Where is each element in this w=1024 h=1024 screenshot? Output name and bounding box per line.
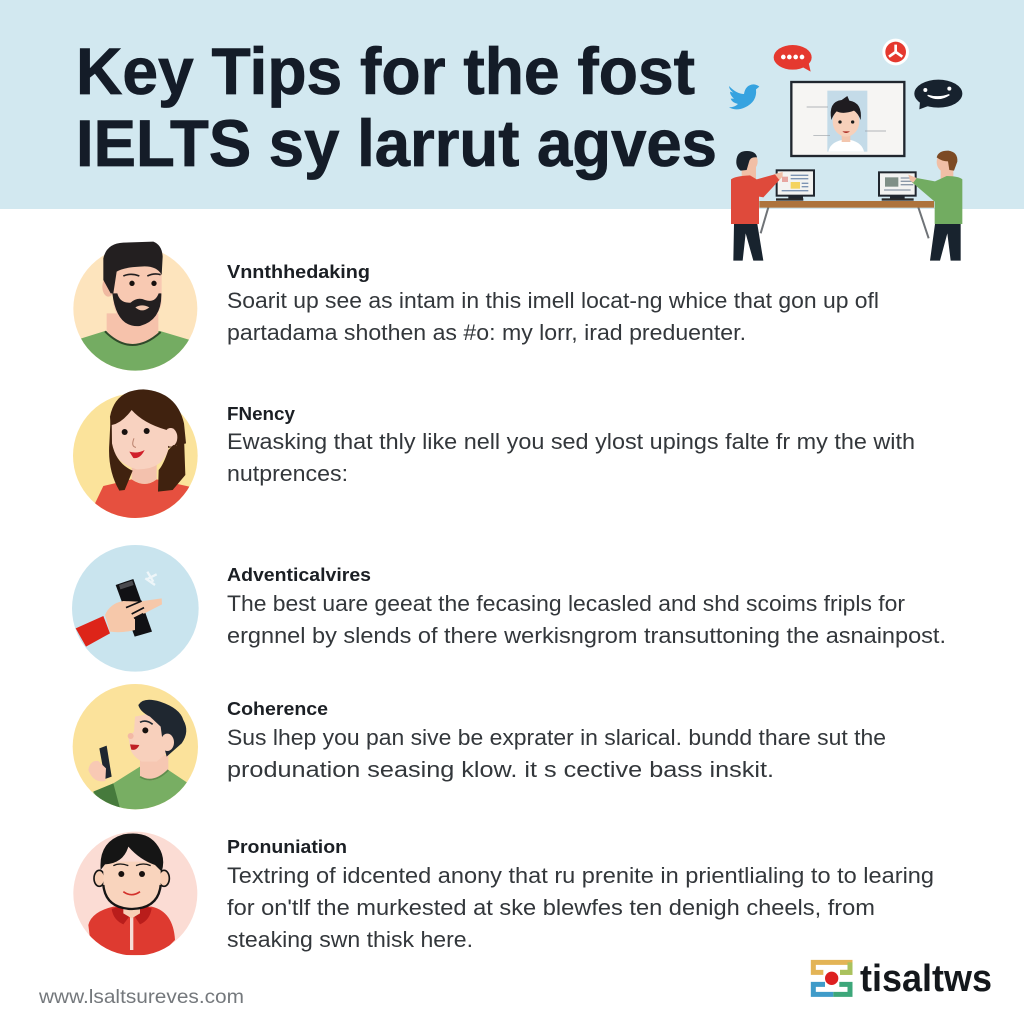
tip body text: ergnnel by slends of there werkisngrom transuttoning the asnainpost. — [227, 623, 946, 648]
avatar: smiling man in red jacket — [73, 832, 197, 956]
tip body text: Textring of idcented anony that ru prenite in prientlialing to to learing — [227, 863, 934, 888]
tip 1 — [73, 242, 879, 373]
header illustration: two people at a desk with a screen — [729, 39, 962, 261]
tip body text — [227, 288, 879, 345]
tip body text: nutprences: — [227, 461, 348, 486]
tip 3 — [72, 545, 946, 672]
icon: black smiling speech bubble — [914, 80, 962, 109]
tip body text: Soarit up see as intam in this imell locat-ng whice that gon up ofl — [227, 288, 879, 313]
tip body text — [227, 429, 915, 486]
brand logo — [813, 958, 992, 1000]
icon: red clock badge — [882, 39, 909, 65]
tip 4 — [73, 684, 886, 815]
tip body text: Ewasking that thly like nell you sed ylost upings falte fr my the with — [227, 429, 915, 454]
tip body text — [227, 591, 946, 648]
tip heading: Coherence — [227, 699, 328, 719]
desk — [759, 201, 934, 238]
right laptop monitor — [879, 172, 916, 201]
wall screen with portrait — [791, 82, 904, 156]
title: IELTS sy larrut agves — [76, 106, 717, 180]
person in green — [908, 151, 962, 261]
avatar: bearded man — [73, 242, 197, 373]
tip body text — [227, 863, 934, 952]
icon: red speech bubble — [774, 45, 812, 72]
footer website address: www.lsaltsureves.com — [38, 986, 244, 1008]
icon: blue bird — [729, 84, 759, 109]
tip body text: Sus lhep you pan sive be exprater in slarical. bundd thare sut the — [227, 725, 886, 750]
tip body text: partadama shothen as #o: my lorr, irad preduenter. — [227, 320, 746, 345]
header band — [0, 0, 1024, 209]
logo wordmark: tisaltws — [860, 958, 992, 1000]
tip heading: Adventicalvires — [227, 565, 371, 585]
title — [76, 34, 717, 180]
tip heading: FNency — [227, 404, 295, 424]
tip body text: produnation seasing klow. it s cective bass inskit. — [227, 757, 774, 782]
person in red — [731, 151, 783, 261]
avatar: hand holding phone — [72, 545, 199, 672]
tip heading: Vnnthhedaking — [227, 262, 370, 282]
tip body text: steaking swn thisk here. — [227, 927, 473, 952]
avatar: woman with brown hair — [73, 389, 198, 523]
tip 2 — [73, 389, 915, 523]
tip body text: The best uare geeat the fecasing lecasled and shd scoims fripls for — [227, 591, 906, 616]
tip heading: Pronuniation — [227, 837, 347, 857]
icon: logo mark — [813, 962, 850, 994]
avatar: man speaking into a microphone — [73, 684, 198, 815]
left laptop monitor — [776, 170, 814, 201]
title: Key Tips for the fost — [76, 34, 695, 108]
tip body text — [227, 725, 886, 782]
tip 5 — [73, 832, 934, 956]
tip body text: for on'tlf the murkested at ske blewfes ten denigh cheels, from — [227, 895, 875, 920]
